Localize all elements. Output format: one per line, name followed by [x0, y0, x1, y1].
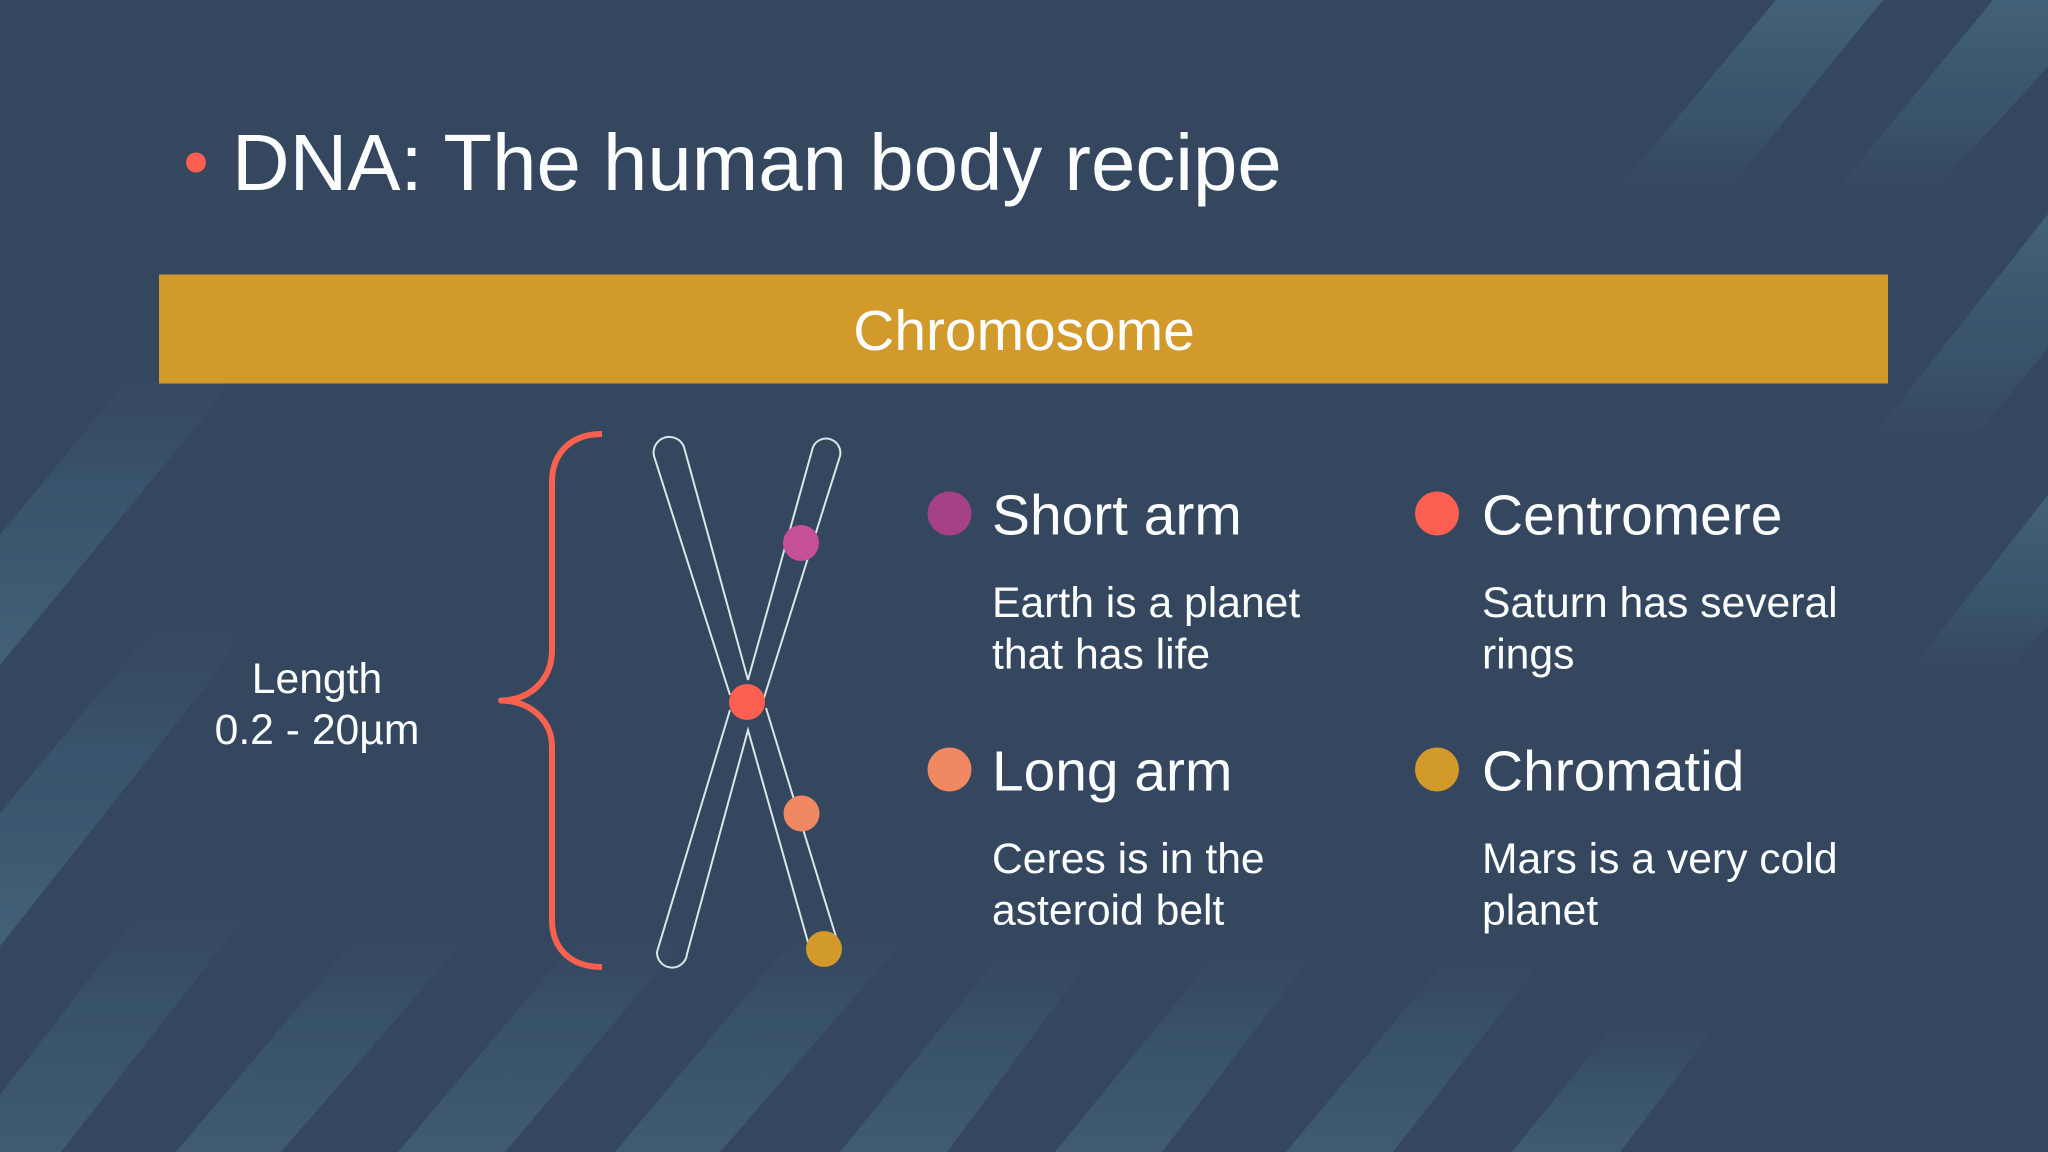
legend item: centromere: Centromere: [1482, 484, 1782, 548]
dot: long arm: [784, 796, 820, 832]
legend item: long arm: asteroid belt: [992, 886, 1225, 934]
dot: centromere: [729, 684, 765, 720]
chromosome outline: [654, 437, 840, 968]
banner: Chromosome: Chromosome: [853, 299, 1195, 363]
legend item: short arm: that has life: [992, 630, 1210, 678]
legend item: short arm: [928, 484, 1300, 678]
text: length label: Length: [252, 655, 382, 703]
legend item: chromatid: [1415, 740, 1838, 934]
diagram: chromosome: [654, 437, 842, 968]
dot: chromatid: [806, 931, 842, 967]
legend item: centromere: [1415, 484, 1838, 678]
text: length label: [215, 655, 419, 754]
bullet: title marker: [186, 152, 206, 172]
legend item: long arm: Ceres is in the: [992, 835, 1265, 883]
legend item: centromere: Saturn has several: [1482, 579, 1838, 627]
legend item: short arm: Short arm: [992, 484, 1242, 548]
legend item: chromatid: Mars is a very cold: [1482, 835, 1838, 883]
legend item: chromatid: planet: [1482, 886, 1598, 934]
legend item: long arm: [928, 740, 1265, 934]
legend item: long arm: Long arm: [992, 740, 1232, 804]
legend item: centromere: rings: [1482, 630, 1574, 678]
dot: short arm: [783, 525, 819, 561]
icon: curly brace: [501, 434, 602, 967]
legend item: chromatid: Chromatid: [1482, 740, 1744, 804]
text: length label: 0.2 - 20µm: [215, 706, 419, 754]
banner: Chromosome: [159, 274, 1888, 384]
legend item: short arm: Earth is a planet: [992, 579, 1300, 627]
title: DNA: The human body recipe: [232, 118, 1282, 207]
